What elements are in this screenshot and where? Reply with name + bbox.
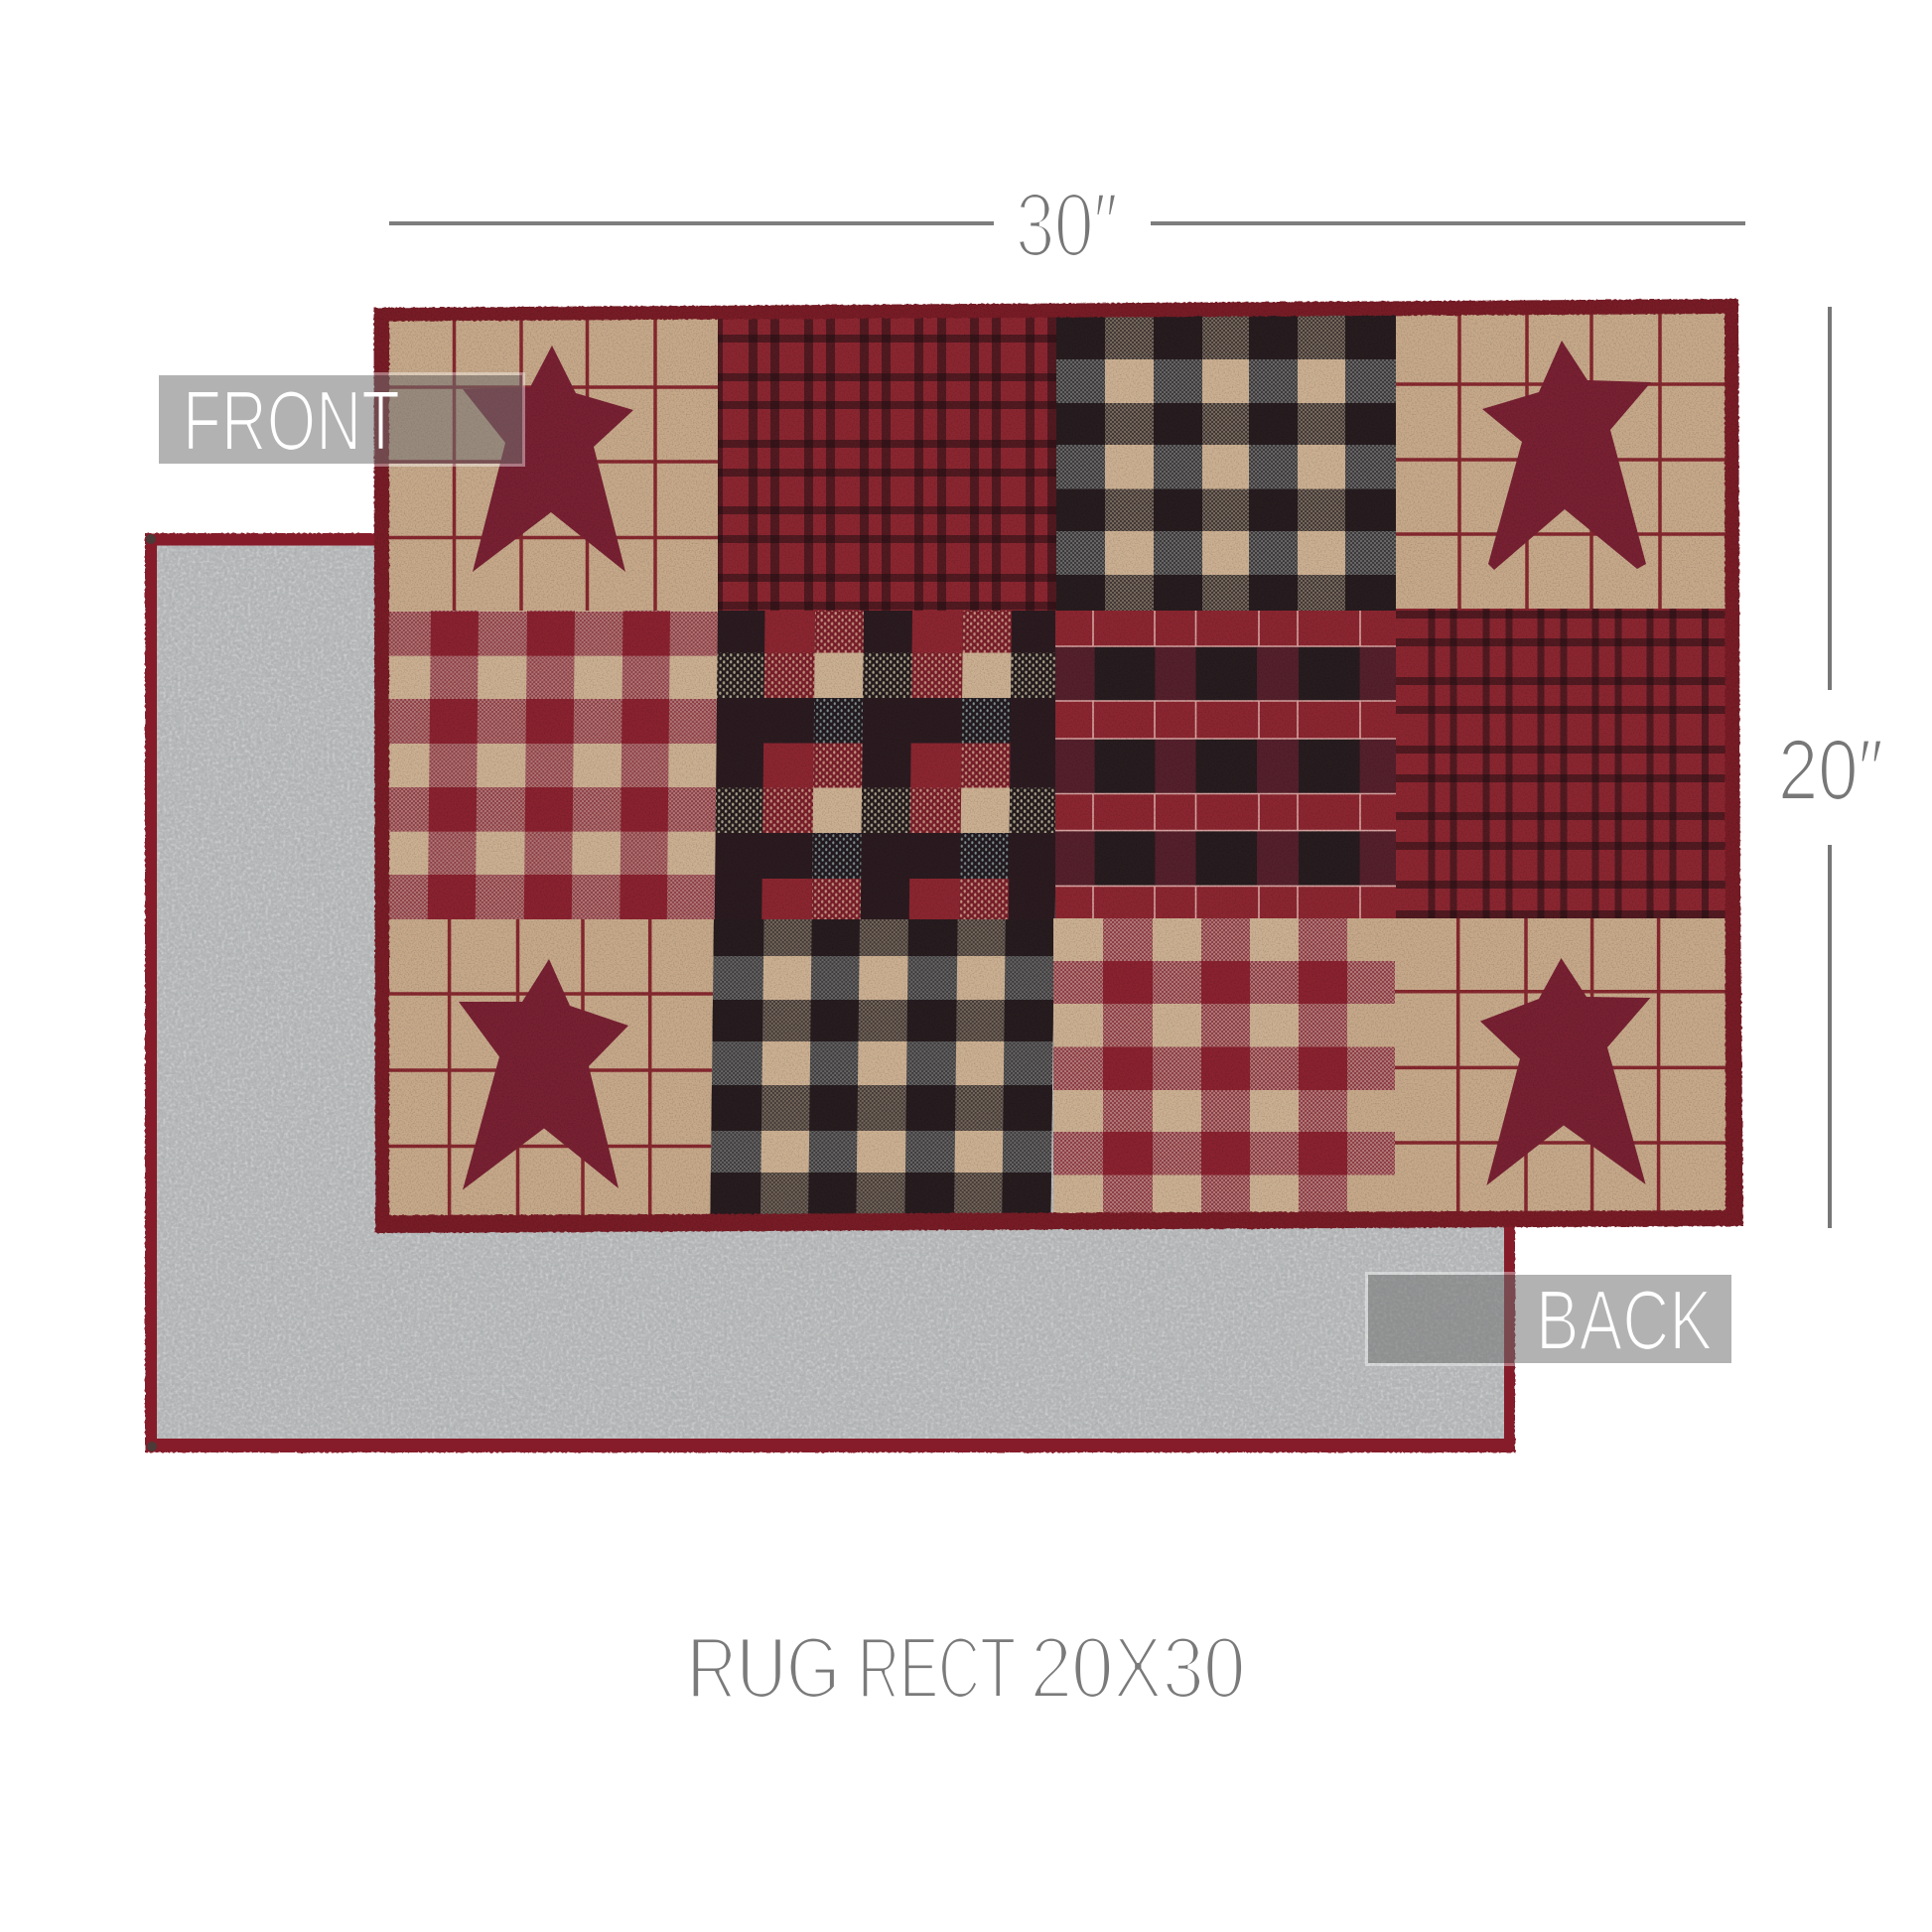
patch: tan star block top right [1396,303,1733,611]
patch: dark dotted check centre [715,611,1058,919]
icon: star top right [1482,341,1651,570]
patch: red gingham bottom [1053,918,1395,1216]
rug surface speckle [373,298,1745,1235]
patch: tan star block top left [382,313,720,613]
patch: red and black blocks centre [1055,611,1397,919]
title: product name: RECT [858,1618,1016,1717]
title: product name: 20X30 [1031,1618,1245,1717]
icon: star top left [463,345,633,572]
label: BACK [1366,1273,1733,1368]
label: BACK: BACK [1536,1274,1713,1368]
dimension: 30 inch width [389,175,1745,276]
title: product name [687,1618,1245,1717]
dimension: 20 inch height [1778,307,1883,1228]
dimension: 30 inch width: 30″ [1016,175,1118,276]
icon: star bottom right [1480,958,1650,1185]
icon: star bottom left [459,959,628,1189]
title: product name: RUG [687,1618,840,1717]
patch: red gingham left [379,611,720,920]
patch: black and cream gingham top [1056,308,1398,612]
dimension: 20 inch height: 20″ [1778,723,1883,818]
patch: tan star block bottom right [1347,918,1734,1221]
back of rug [145,533,1515,1452]
patch: black and cream gingham bottom [710,919,1054,1217]
front of rug [373,298,1745,1235]
patch: red plaid right [1396,609,1733,919]
rug binding border [373,299,1743,1233]
patch: red plaid top [718,310,1057,612]
patch: tan star block bottom left [382,919,720,1222]
label: FRONT: FRONT [183,374,400,469]
